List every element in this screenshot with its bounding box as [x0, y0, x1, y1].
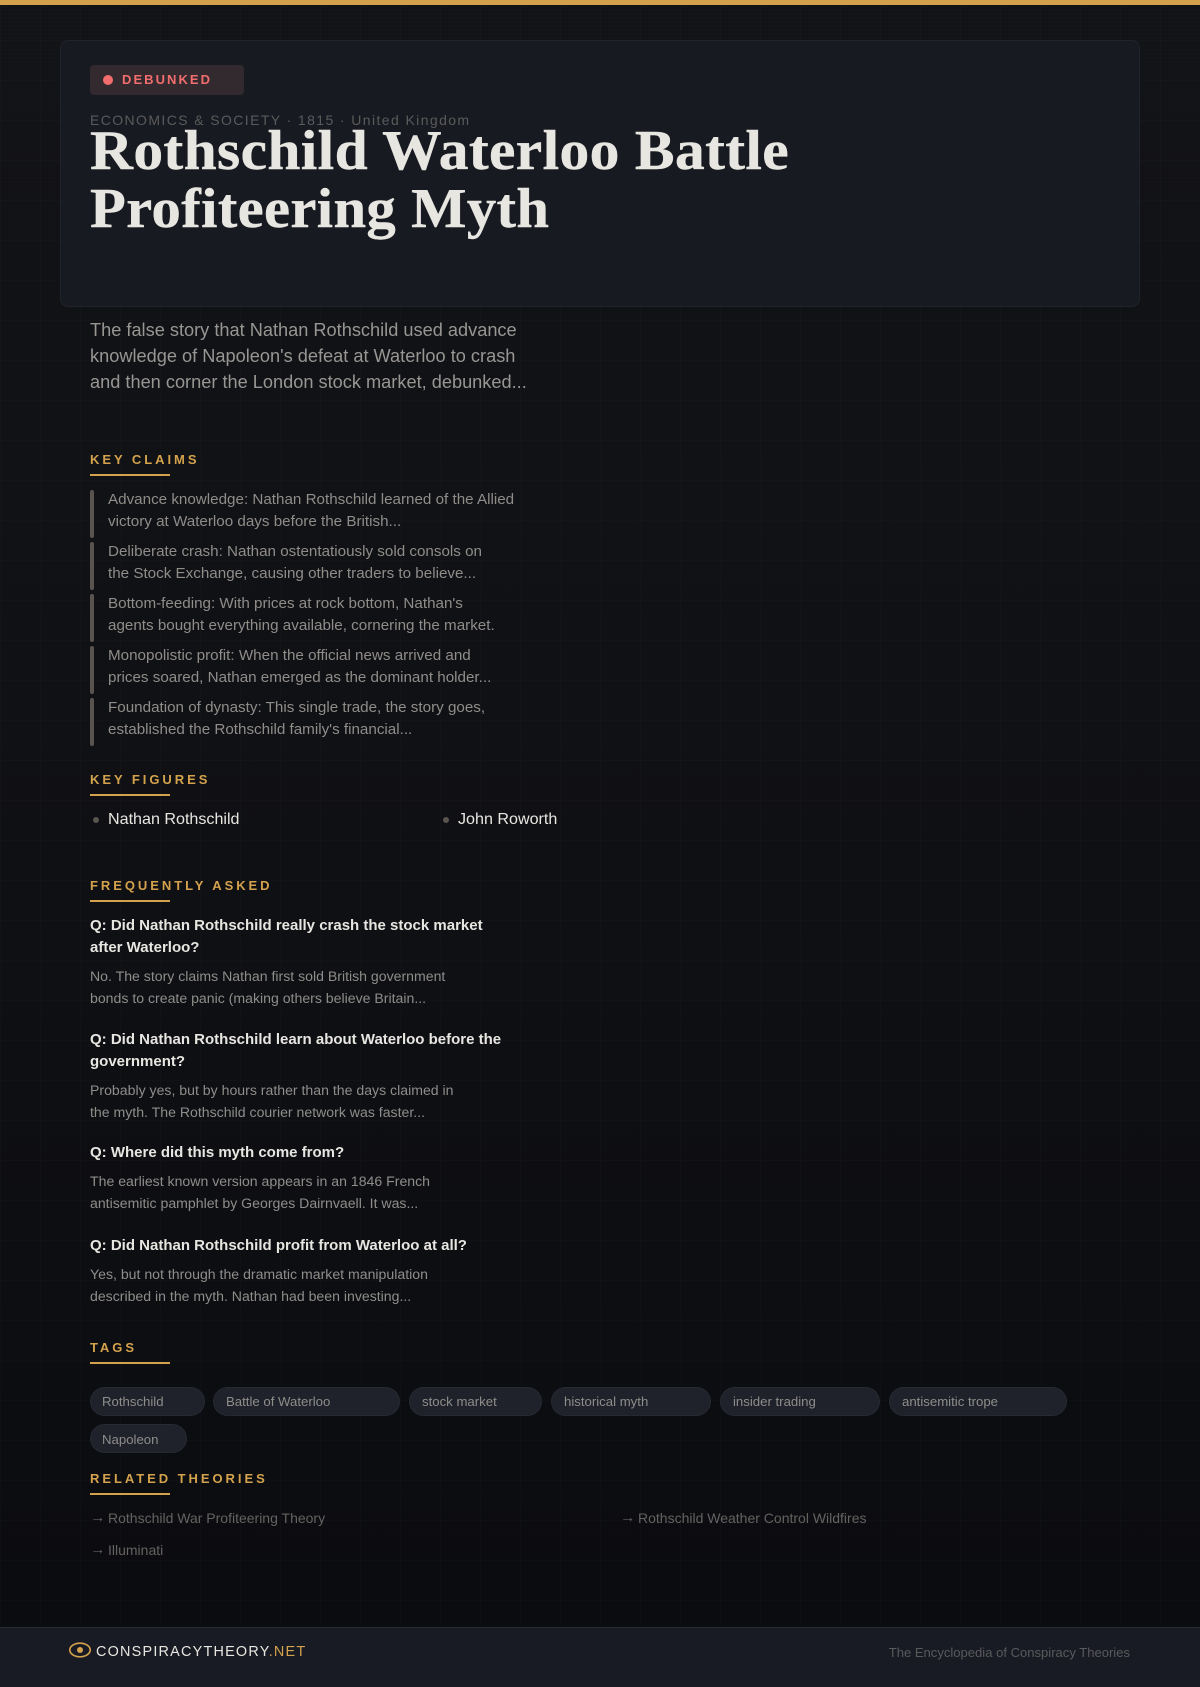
faq 2: the myth. The Rothschild courier network was faster...: [90, 1104, 425, 1120]
claim 5: Foundation of dynasty: This single trade, the story goes,: [108, 699, 485, 716]
panel: header card: [60, 40, 1140, 307]
faq 2: government?: [90, 1053, 185, 1070]
icon: status dot: [103, 75, 113, 85]
claim 5: [90, 698, 485, 746]
title: [90, 120, 789, 240]
tag: [90, 1387, 205, 1416]
panel: key figures: [90, 772, 557, 828]
faq 1: after Waterloo?: [90, 939, 199, 956]
tag: Napoleon: [102, 1432, 158, 1447]
tag: [551, 1387, 711, 1416]
faq 2: Probably yes, but by hours rather than the days claimed in: [90, 1082, 454, 1098]
related link: →: [90, 1541, 105, 1557]
faq 3: The earliest known version appears in an 1846 French: [90, 1173, 430, 1189]
tag: [213, 1387, 400, 1416]
tag: [90, 1424, 187, 1453]
heading: key claims: KEY CLAIMS: [90, 452, 199, 467]
faq 4: Yes, but not through the dramatic market manipulation: [90, 1266, 428, 1282]
faq 3: antisemitic pamphlet by Georges Dairnvaell. It was...: [90, 1195, 418, 1211]
related link: →: [620, 1509, 635, 1525]
top accent bar: [0, 0, 1200, 5]
tag: [720, 1387, 880, 1416]
heading: key claims: [90, 450, 170, 476]
heading: related theories: [90, 1469, 170, 1495]
title: Profiteering Myth: [90, 178, 549, 240]
claim 4: Monopolistic profit: When the official news arrived and: [108, 647, 471, 664]
faq 2: [90, 1031, 501, 1120]
faq 4: [90, 1237, 467, 1304]
faq 1: No. The story claims Nathan first sold British government: [90, 968, 445, 984]
claim 3: Bottom-feeding: With prices at rock bottom, Nathan's: [108, 595, 463, 612]
badge label: DEBUNKED: [122, 72, 212, 87]
tag: [889, 1387, 1067, 1416]
claim 2: the Stock Exchange, causing other traders to believe...: [108, 565, 476, 582]
faq 2: Q: Did Nathan Rothschild learn about Waterloo before the: [90, 1031, 501, 1048]
heading: tags: [90, 1338, 170, 1364]
claim 4: prices soared, Nathan emerged as the dominant holder...: [108, 669, 491, 686]
panel: key claims: [90, 452, 514, 746]
claim 1: Advance knowledge: Nathan Rothschild learned of the Allied: [108, 491, 514, 508]
claim 2: [90, 542, 482, 590]
title: Rothschild Waterloo Battle: [90, 120, 789, 182]
intro description: The false story that Nathan Rothschild used advance: [90, 320, 517, 340]
related link: Rothschild War Profiteering Theory: [108, 1510, 325, 1526]
figure: Nathan Rothschild: Nathan Rothschild: [108, 810, 240, 828]
claim 4: [90, 646, 491, 694]
faq 1: bonds to create panic (making others believe Britain...: [90, 990, 426, 1006]
faq 4: Q: Did Nathan Rothschild profit from Waterloo at all?: [90, 1237, 467, 1254]
faq 4: described in the myth. Nathan had been investing...: [90, 1288, 411, 1304]
related link: Rothschild Weather Control Wildfires: [638, 1510, 866, 1526]
heading: frequently asked: [90, 876, 170, 902]
related link: Illuminati: [108, 1542, 163, 1558]
tag: Rothschild: [102, 1394, 164, 1409]
tag: stock market: [422, 1394, 497, 1409]
tag: antisemitic trope: [902, 1394, 998, 1409]
figure: John Roworth: John Roworth: [458, 810, 557, 828]
claim 5: established the Rothschild family's financial...: [108, 721, 412, 738]
footer bar: [0, 1627, 1200, 1687]
faq 1: Q: Did Nathan Rothschild really crash the stock market: [90, 917, 483, 934]
category and date line: ECONOMICS & SOCIETY · 1815 · United Kingdom: [90, 112, 470, 128]
claim 3: agents bought everything available, cornering the market.: [108, 617, 495, 634]
footer tagline: The Encyclopedia of Conspiracy Theories: [889, 1645, 1130, 1660]
intro description: [90, 320, 527, 392]
claim 1: victory at Waterloo days before the British...: [108, 513, 401, 530]
claim 1: [90, 490, 514, 538]
faq 3: Q: Where did this myth come from?: [90, 1144, 344, 1161]
icon: eye logo: [69, 1642, 91, 1658]
intro description: and then corner the London stock market, debunked...: [90, 372, 527, 392]
tag: insider trading: [733, 1394, 816, 1409]
panel: tags: [90, 1340, 1067, 1453]
tag: [409, 1387, 542, 1416]
related link: →: [90, 1509, 105, 1525]
claim 2: Deliberate crash: Nathan ostentatiously sold consols on: [108, 543, 482, 560]
intro description: knowledge of Napoleon's defeat at Waterloo to crash: [90, 346, 515, 366]
heading: key figures: [90, 770, 170, 796]
panel: frequently asked: [90, 878, 501, 1304]
faq 3: [90, 1144, 430, 1211]
tag: Battle of Waterloo: [226, 1394, 330, 1409]
panel: related theories: [90, 1471, 866, 1558]
heading: tags: TAGS: [90, 1340, 137, 1355]
panel: frequently asked: FREQUENTLY ASKED: [90, 878, 273, 893]
faq 1: [90, 917, 483, 1006]
tag: historical myth: [564, 1394, 648, 1409]
panel: related theories: RELATED THEORIES: [90, 1471, 268, 1486]
claim 3: [90, 594, 495, 642]
status badge: debunked: [90, 65, 244, 95]
logo wordmark: CONSPIRACYTHEORY.NET: [96, 1644, 306, 1660]
heading: key figures: KEY FIGURES: [90, 772, 210, 787]
